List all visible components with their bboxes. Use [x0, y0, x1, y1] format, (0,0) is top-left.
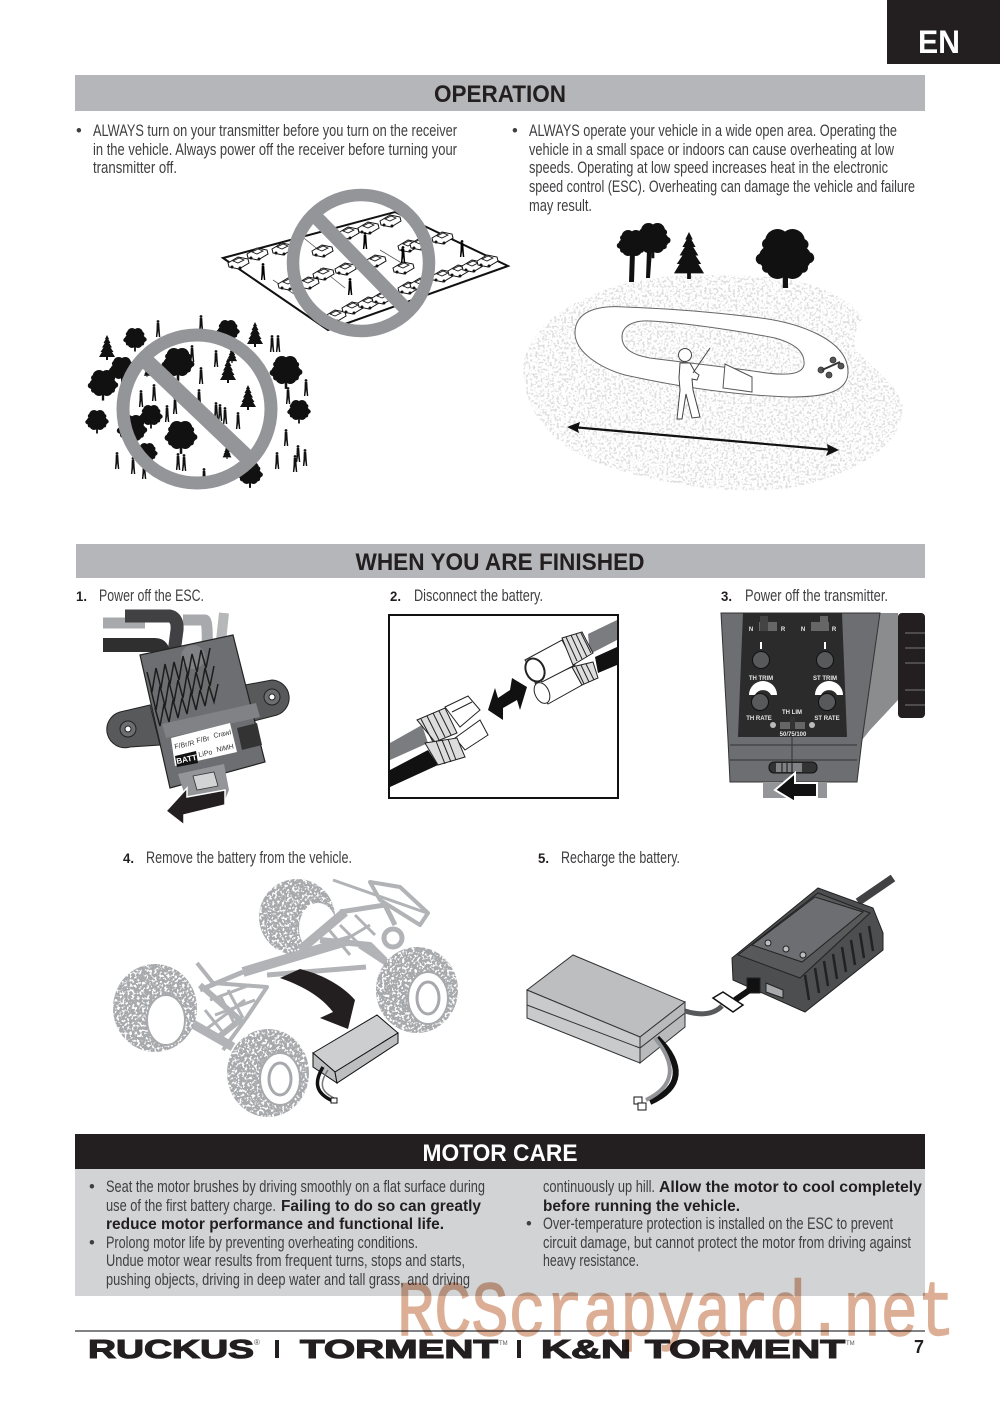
illustration: battery and charger	[527, 878, 893, 1110]
track	[575, 307, 848, 397]
footer: product logos and page number: TORMENT	[645, 1334, 845, 1364]
wheel: top	[259, 879, 337, 955]
wires	[103, 613, 224, 668]
control panel labels: R	[832, 627, 837, 633]
right connector	[522, 632, 598, 706]
text block: operation right bullet: speeds. Operating at low speed increases heat in the electronic	[529, 159, 888, 177]
heading: when you are finished: WHEN YOU ARE FINISHED	[356, 549, 644, 576]
connector	[178, 764, 229, 802]
heading: operation	[75, 75, 925, 111]
text: left column: •	[89, 1178, 95, 1196]
control panel labels: ST RATE	[814, 716, 840, 722]
heading: motor care	[75, 1134, 925, 1169]
step 1 label: 1.	[76, 588, 87, 604]
panel: motor care	[75, 1134, 925, 1296]
step 4 label: Remove the battery from the vehicle.	[146, 849, 352, 867]
footer: product logos and page number: TORMENT	[300, 1334, 498, 1364]
text: right column: Allow the motor to cool completely	[659, 1179, 922, 1196]
text: left column: Undue motor wear results from frequent turns, stops and starts,	[106, 1252, 465, 1270]
heading: when you are finished	[76, 544, 925, 578]
prohibition sign over parking lot	[293, 195, 429, 331]
footer: product logos and page number: TM	[846, 1341, 855, 1347]
step 2 label	[390, 587, 543, 605]
ramp	[723, 364, 752, 392]
step 2 label: Disconnect the battery.	[414, 587, 543, 605]
text: left column: use of the first battery charge.	[106, 1197, 276, 1215]
control panel labels: 50/75/100	[780, 732, 807, 738]
battery pack	[527, 955, 685, 1063]
illustration: ESC with battery connector: LiPo	[198, 749, 213, 759]
footer: product logos and page number: K&N	[541, 1334, 631, 1364]
control panel labels: N	[801, 627, 805, 633]
prohibition sign over trees	[123, 335, 271, 483]
illustration: ESC with battery connector: NiMH	[216, 743, 235, 754]
footer: product logos and page number: ®	[254, 1338, 260, 1347]
text: left column: Prolong motor life by preventing overheating conditions.	[106, 1234, 418, 1252]
heading: motor care: MOTOR CARE	[422, 1140, 578, 1167]
control panel labels: N	[749, 627, 753, 633]
text block: operation right bullet: •	[512, 122, 518, 140]
illustration: ESC with battery connector: F/Br/R	[174, 740, 195, 751]
heat sink fins	[147, 648, 218, 726]
power cord	[858, 878, 893, 902]
step 1 label: Power off the ESC.	[99, 587, 204, 605]
knobs	[749, 642, 843, 729]
text block: operation left bullet: in the vehicle. Always power off the receiver before turning your	[93, 141, 457, 159]
heading: operation: OPERATION	[434, 81, 566, 108]
BATT tag: BATT	[176, 753, 198, 766]
trees	[617, 223, 814, 288]
balance lead	[634, 1038, 676, 1110]
step 4 label: 4.	[123, 850, 134, 866]
control panel labels	[746, 616, 840, 738]
text block: operation left bullet: ALWAYS turn on your transmitter before you turn on the receiver	[93, 122, 457, 140]
step 3 label: Power off the transmitter.	[745, 587, 888, 605]
step 3 label: 3.	[721, 588, 732, 604]
arrow	[166, 788, 225, 825]
text block: operation right bullet: vehicle in a small space or indoors can cause overheating at low	[529, 141, 894, 159]
text: left column	[89, 1178, 485, 1289]
person with transmitter	[677, 348, 710, 419]
chassis	[163, 880, 428, 1050]
text: right column: continuously up hill.	[543, 1178, 655, 1196]
illustration: crowded parking lot prohibited	[223, 195, 508, 331]
control panel labels: TH LIM	[782, 710, 802, 716]
text: right column: Over-temperature protection is installed on the ESC to prevent	[543, 1215, 893, 1233]
left connector	[417, 696, 488, 765]
mounting ears	[107, 680, 289, 748]
step 5 label: 5.	[538, 850, 549, 866]
step 5 label	[538, 849, 680, 867]
illustration: ESC with battery connector: Crawl	[213, 729, 232, 740]
text: left column: reduce motor performance and functional life.	[106, 1216, 444, 1233]
text: right column	[526, 1178, 922, 1270]
charge lead and connector	[685, 987, 754, 1014]
text block: operation right bullet	[512, 122, 915, 215]
wheel: front	[227, 1029, 309, 1117]
wheel: rear left	[113, 964, 197, 1052]
double arrow	[567, 422, 839, 456]
text: right column: before running the vehicle.	[543, 1198, 740, 1215]
text: left column: •	[89, 1234, 95, 1252]
footer: product logos and page number: RUCKUS	[88, 1334, 254, 1364]
battery	[313, 1015, 398, 1083]
control panel labels: ST TRIM	[813, 676, 837, 682]
text block: operation left bullet: •	[76, 122, 82, 140]
wheel: right	[376, 947, 458, 1033]
footer: product logos and page number: 7	[914, 1337, 924, 1357]
illustration: disconnect battery	[389, 615, 618, 798]
charger	[732, 888, 883, 1012]
arrow	[775, 773, 817, 802]
step 5 label: Recharge the battery.	[561, 849, 680, 867]
illustration: truck chassis with battery removed	[113, 879, 458, 1117]
control panel labels: R	[781, 627, 786, 633]
power switch	[769, 762, 817, 773]
small RC truck	[818, 357, 844, 378]
ESC body	[140, 635, 265, 788]
illustration: transmitter	[721, 613, 925, 802]
illustration: ESC with battery connector: F/Br	[196, 735, 211, 745]
text: right column: •	[526, 1215, 532, 1233]
text block: operation right bullet: may result.	[529, 197, 592, 215]
double arrow	[488, 678, 527, 720]
text block: operation left bullet	[76, 122, 457, 177]
illustration: trees and people prohibited	[85, 315, 311, 488]
control panel labels: TH TRIM	[749, 676, 773, 682]
illustration: wide open area with track	[523, 223, 903, 490]
settings label	[171, 723, 237, 766]
step 1 label	[76, 587, 204, 605]
gravel ground	[523, 275, 903, 490]
wires	[390, 620, 617, 787]
footer: product logos and page number: TM	[499, 1341, 508, 1347]
text: right column: heavy resistance.	[543, 1252, 639, 1270]
illustration: ESC with battery connector	[103, 613, 289, 825]
text block: operation left bullet: transmitter off.	[93, 159, 177, 177]
step 2 label: 2.	[390, 588, 401, 604]
body	[721, 613, 880, 782]
text: left column: pushing objects, driving in deep water and tall grass, and driving	[106, 1271, 470, 1289]
text: left column: Failing to do so can greatly	[281, 1198, 481, 1215]
curved arrow	[280, 969, 355, 1029]
language tab: EN: EN	[918, 24, 960, 60]
wheel	[898, 613, 925, 718]
step 3 label	[721, 587, 888, 605]
text block: operation right bullet: ALWAYS operate your vehicle in a wide open area. Operating the	[529, 122, 897, 140]
footer: product logos and page number	[75, 1330, 925, 1364]
control panel labels: TH RATE	[746, 716, 772, 722]
text: left column: Seat the motor brushes by driving smoothly on a flat surface during	[106, 1178, 485, 1196]
battery lead	[317, 1067, 337, 1103]
language tab: EN	[887, 0, 1000, 64]
